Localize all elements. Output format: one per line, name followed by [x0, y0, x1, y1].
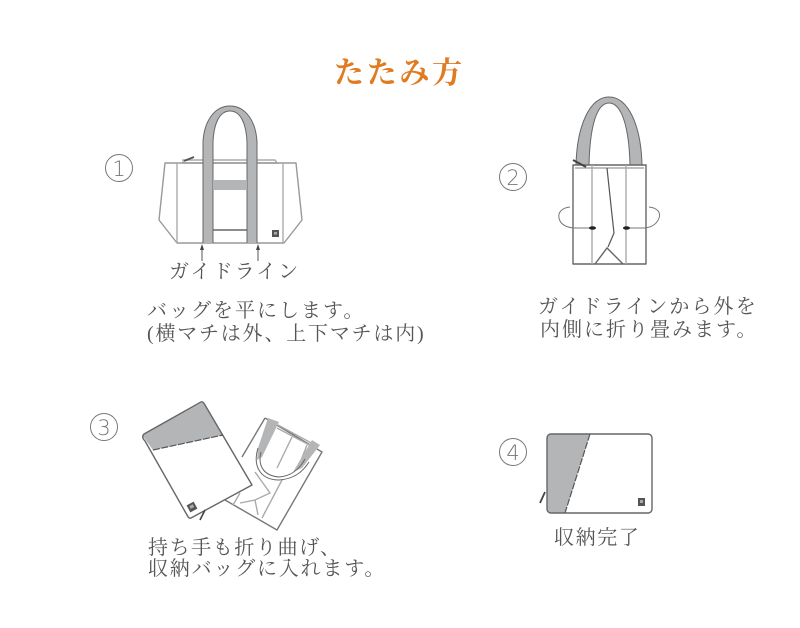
panel: step 4 [500, 434, 652, 549]
illustration: bag being put into pouch [142, 402, 322, 530]
label: guide line: ガイドライン [169, 261, 300, 283]
step number 1: 1 [112, 157, 126, 181]
arrows: fold inward [559, 207, 660, 230]
text: step 1 instruction [147, 299, 426, 345]
text: step 3 instruction: 収納バッグに入れます。 [148, 557, 386, 580]
text: step 4 caption: 収納完了 [554, 526, 640, 549]
text: step 1 instruction: (横マチは外、上下マチは内) [147, 322, 426, 345]
arrows: guide lines [200, 244, 260, 261]
text: step 2 instruction: 内側に折り畳みます。 [540, 318, 758, 341]
illustration: flat tote bag [159, 106, 302, 243]
step number 1 [106, 154, 132, 182]
step number 3 [90, 414, 118, 440]
text: step 2 instruction [538, 295, 758, 341]
step number 3: 3 [97, 416, 111, 440]
step number 2: 2 [506, 166, 520, 190]
panel: step 1 [106, 106, 426, 345]
text: step 3 instruction: 持ち手も折り曲げ、 [148, 536, 342, 559]
title: たたみ方 [334, 57, 465, 90]
panel: step 3 [90, 402, 386, 580]
step number 4 [500, 438, 526, 466]
illustration: folded sides [573, 97, 646, 264]
text: step 2 instruction: ガイドラインから外を [538, 295, 758, 318]
text: step 1 instruction: バッグを平にします。 [147, 299, 365, 322]
panel: step 2 [500, 97, 758, 341]
step number 4: 4 [506, 441, 520, 465]
text: step 3 instruction [148, 536, 386, 580]
illustration: folded pouch [540, 434, 652, 513]
step number 2 [500, 164, 526, 190]
